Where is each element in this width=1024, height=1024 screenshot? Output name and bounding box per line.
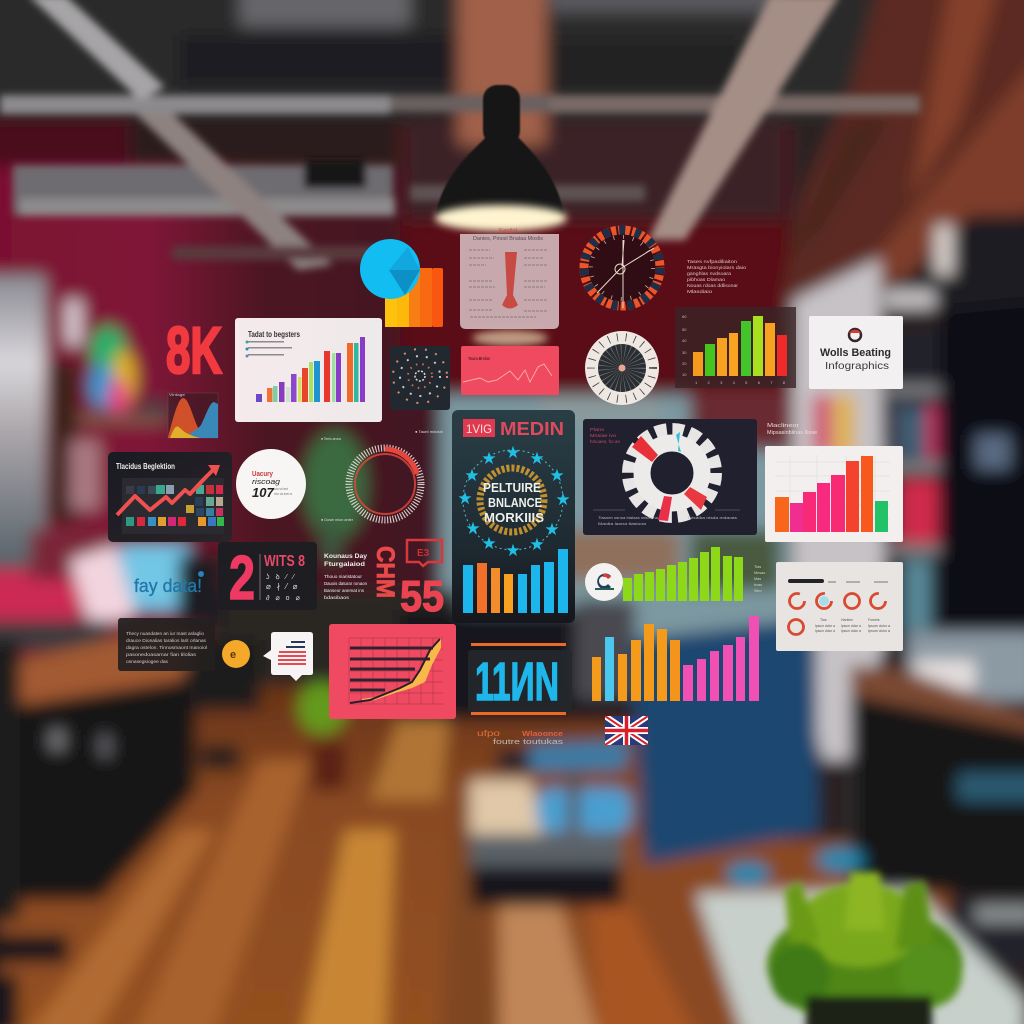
panel: trend on heatmap	[108, 452, 232, 542]
brick column	[458, 0, 546, 145]
wheel text: PELTUIRE	[483, 480, 541, 495]
star ring: ★	[544, 520, 560, 539]
tab bar	[788, 579, 824, 583]
left wall details	[0, 275, 45, 567]
icon grid: ʖꝺ⁄⁄	[266, 573, 300, 581]
icon: speech bubble	[407, 540, 442, 566]
rotated label: CHM: CHM	[371, 546, 399, 598]
legend: lime chart	[754, 565, 765, 593]
axis labels: 40	[682, 338, 687, 343]
grid	[349, 638, 443, 704]
legend: lime chart: Mnsao	[754, 571, 765, 575]
callout: white circle stat	[236, 449, 306, 519]
star ring: ★	[529, 449, 545, 468]
text block: caption	[324, 553, 367, 600]
axis labels: 50	[682, 327, 687, 332]
legend: lime chart: bvas	[754, 583, 762, 587]
white wall	[793, 258, 885, 760]
note lines: pasonedoasamar fian tilolias	[126, 652, 197, 657]
ring captions: Fomeis	[868, 618, 880, 622]
plant behind ring	[303, 430, 367, 540]
small area chart: Vintage	[169, 393, 185, 397]
left lower: screen and laptop	[0, 570, 80, 640]
panel: gear chart: hmoaes, ho an	[590, 439, 620, 444]
note lines: osnasegsiogee das	[126, 659, 169, 664]
wheel text	[483, 480, 544, 525]
icon: round logo badge	[585, 563, 623, 601]
ring captions: Ipsum dolor a	[841, 629, 861, 633]
star ring: ★	[505, 541, 521, 560]
low table	[470, 834, 622, 866]
line	[463, 364, 552, 382]
star ring: ★	[549, 466, 565, 485]
icon: document speech note	[263, 632, 313, 681]
bars	[693, 352, 703, 376]
chart: orange and pink bars	[592, 616, 759, 701]
ring captions: Ipsum dolor a	[815, 629, 835, 633]
chart: yellow and orange bars	[385, 268, 443, 327]
text block: right of clock: ganghlas nvdsoara	[687, 271, 732, 276]
ring captions: Ipsum dolor a	[868, 629, 890, 633]
panel: 2 wits	[218, 542, 317, 613]
legend: lime chart: Tlas	[754, 565, 761, 569]
text block: caption: Banseor anemat ins	[324, 588, 365, 593]
star ring: ★	[529, 535, 545, 554]
icon: union flag	[605, 716, 648, 745]
star ring: ★	[555, 490, 571, 509]
text block: right of clock	[687, 259, 747, 294]
faint lamp reflection	[472, 330, 548, 346]
callout: white circle stat: dolor soit amet as	[274, 492, 292, 496]
ring captions: Tlas	[820, 618, 827, 622]
axis labels: 20	[682, 361, 687, 366]
bars	[463, 549, 568, 613]
caption: above white chart	[767, 423, 817, 436]
window area	[440, 395, 790, 645]
red wall	[0, 117, 460, 657]
star ring: ★	[505, 443, 521, 462]
caption: above white chart: Mipsasinbilnas Ilisse	[767, 430, 817, 436]
axis	[593, 509, 740, 511]
callout: white circle stat: dolor soit amet	[274, 487, 288, 491]
wheel text: BNLANCE	[488, 495, 542, 510]
text block: right of clock: Tases nvfpadiliaiton	[687, 259, 738, 264]
icon: logo	[849, 329, 861, 341]
text block: right of clock: Mrasgta bionyiolars daio	[687, 265, 747, 270]
stat number: 107	[252, 485, 274, 500]
top-right boxes	[885, 215, 1024, 310]
note lines: drauce Dionalias taralios larit orlanas	[126, 638, 207, 643]
icon: speech bubble: E3	[417, 548, 430, 559]
trend arrow	[117, 469, 214, 515]
panel: rising bar chart	[235, 318, 382, 422]
pie chart: blue	[360, 239, 420, 299]
rings	[788, 594, 886, 634]
panel: gear chart: Tolsaiba nisda mdaoas	[687, 516, 737, 520]
ring captions: Ipsum dolor a	[868, 624, 890, 628]
text block: caption: Thouo niaristatour	[324, 574, 363, 579]
small plant	[298, 682, 346, 734]
ceiling	[0, 0, 1024, 120]
icon: yellow badge	[222, 640, 250, 668]
panel: Medin wheel and bars	[452, 410, 575, 623]
note lines: Thecy nuasdaten an iur mast aslaglio	[126, 631, 205, 636]
legend lines	[246, 340, 292, 358]
star ring	[457, 443, 571, 560]
chart: radial clock	[584, 230, 660, 308]
panel: 11NN stat	[468, 643, 572, 715]
legend: lime chart: Sleo	[754, 589, 762, 593]
label lines: Uacury	[252, 471, 273, 478]
caption: above white chart: Maclineor	[767, 423, 799, 429]
gauge: tick ring: ● Taunt mdosin	[415, 429, 443, 434]
panel: ring stats	[776, 562, 903, 651]
chart: dial	[585, 331, 659, 405]
star ring: ★	[465, 519, 481, 538]
wedges	[632, 436, 658, 462]
brick right	[780, 0, 1024, 310]
text block: right of clock: pibhoas Dlamao	[687, 277, 726, 282]
axis labels: 30	[682, 350, 687, 355]
area	[362, 638, 441, 702]
small area chart	[168, 393, 218, 438]
ring captions	[815, 618, 890, 633]
panel: gear chart: Tlasnen osnoa bialoas ndsmona	[598, 516, 659, 520]
panel: 2 wits: ∂⌀o⌀	[266, 595, 306, 602]
bars	[256, 337, 365, 402]
wheel text: MORKIIIS	[484, 510, 544, 525]
big stat: 8K: 8K	[166, 313, 222, 387]
heading: Tadat to begsters	[248, 330, 300, 339]
heading: Toura Brolos	[468, 356, 490, 361]
panel: white title card	[809, 316, 903, 389]
heading: Tlacidus Beglektion	[116, 461, 175, 471]
brand: fay data: fay data!	[134, 576, 202, 596]
bars	[775, 497, 789, 532]
panel: pink bar chart	[765, 446, 903, 542]
star ring: ★	[464, 466, 480, 485]
lines	[469, 250, 548, 317]
star ring: ★	[481, 534, 497, 553]
stripes	[350, 648, 433, 690]
dark center	[210, 590, 460, 685]
hands	[597, 240, 654, 308]
note lines: dagra ostelon. Tinnosmaont manoiol	[126, 645, 207, 650]
pendant lamp	[435, 85, 567, 231]
figure	[502, 252, 518, 308]
title: Wolls Beating	[820, 347, 891, 359]
text block: right of clock: Nouas rdoas ddlisonar	[687, 283, 739, 288]
panel: Medin wheel and bars: 1VIG	[466, 422, 492, 436]
gauge labels: ● Tenis aroos	[321, 436, 341, 441]
axis labels	[682, 314, 687, 377]
panel: dark text note	[118, 618, 215, 671]
caption: under 11NN: foutre toutukas	[493, 739, 564, 746]
panel: gear chart: Maotia laona tlasiona	[598, 522, 647, 526]
blue chair	[630, 618, 818, 865]
legend: lime chart: Mas	[754, 577, 761, 581]
caption: under 11NN	[477, 729, 564, 746]
panel: white title card: Infographics	[825, 360, 889, 372]
panel: green bar chart	[675, 307, 796, 388]
icon: yellow badge: e	[230, 649, 236, 661]
title: WITS 8	[264, 553, 305, 570]
heading: Eagilid	[499, 228, 517, 234]
star ring: ★	[457, 489, 473, 508]
dots ring	[393, 349, 447, 403]
black cabinet	[940, 295, 1024, 630]
gauge: tick ring	[321, 429, 443, 522]
title: MEDIN	[500, 419, 564, 439]
background: ceiling beams and pipes	[0, 0, 920, 270]
panel: radial dots	[390, 346, 450, 410]
axis labels: 10	[682, 372, 687, 377]
note lines	[126, 631, 207, 664]
callout: white circle stat: riscoag	[252, 479, 280, 486]
panel: red line card	[461, 346, 559, 395]
panel: red line chart	[329, 624, 456, 719]
left desk and cabinet	[0, 620, 110, 650]
text block: right of clock: Mlasdiaio	[687, 289, 713, 294]
chart: lime bars	[623, 547, 743, 601]
caption: under 11NN: Wlaoonce	[522, 731, 563, 738]
ring captions: Ipsum dolor a	[841, 624, 861, 628]
heatmap	[122, 478, 224, 534]
stat text: 11ИN	[475, 652, 559, 712]
badge	[463, 419, 495, 437]
caption: Plans	[590, 427, 605, 432]
ring captions: Ipsum dolor a	[815, 624, 835, 628]
text block: caption: Fturgalaiod	[324, 561, 365, 568]
panel: 2 wits: ⌀∤⁄⌀	[266, 582, 303, 591]
shelves	[885, 330, 945, 640]
floor	[0, 650, 720, 1024]
text block: caption: Dauxis daturar ronaon	[324, 581, 367, 586]
gear	[630, 431, 714, 515]
text block: caption: Kounaus Day	[324, 553, 367, 560]
panel: doc under lamp	[460, 228, 559, 329]
caption: under 11NN: ufpo	[477, 729, 501, 738]
big stat: 55: 55	[400, 572, 444, 621]
foreground plant	[767, 872, 963, 1024]
panel: green bar chart: 1 2 3 4 5 6 7 8	[695, 380, 786, 385]
panel: gear chart: Mnsiae ivo	[590, 433, 617, 438]
gauge: tick ring: ● Dosie mion anter	[321, 517, 354, 522]
number 2: 2	[229, 544, 255, 613]
axis labels: 60	[682, 314, 687, 319]
text block: caption: bdasibaos	[324, 595, 350, 600]
star ring: ★	[481, 449, 497, 468]
panel: gear chart	[583, 419, 757, 535]
panel: doc under lamp: Danies, Pinosl Bnalaa Moslis	[473, 236, 544, 242]
right side	[908, 632, 1024, 700]
ring captions: Hanties	[841, 618, 853, 622]
